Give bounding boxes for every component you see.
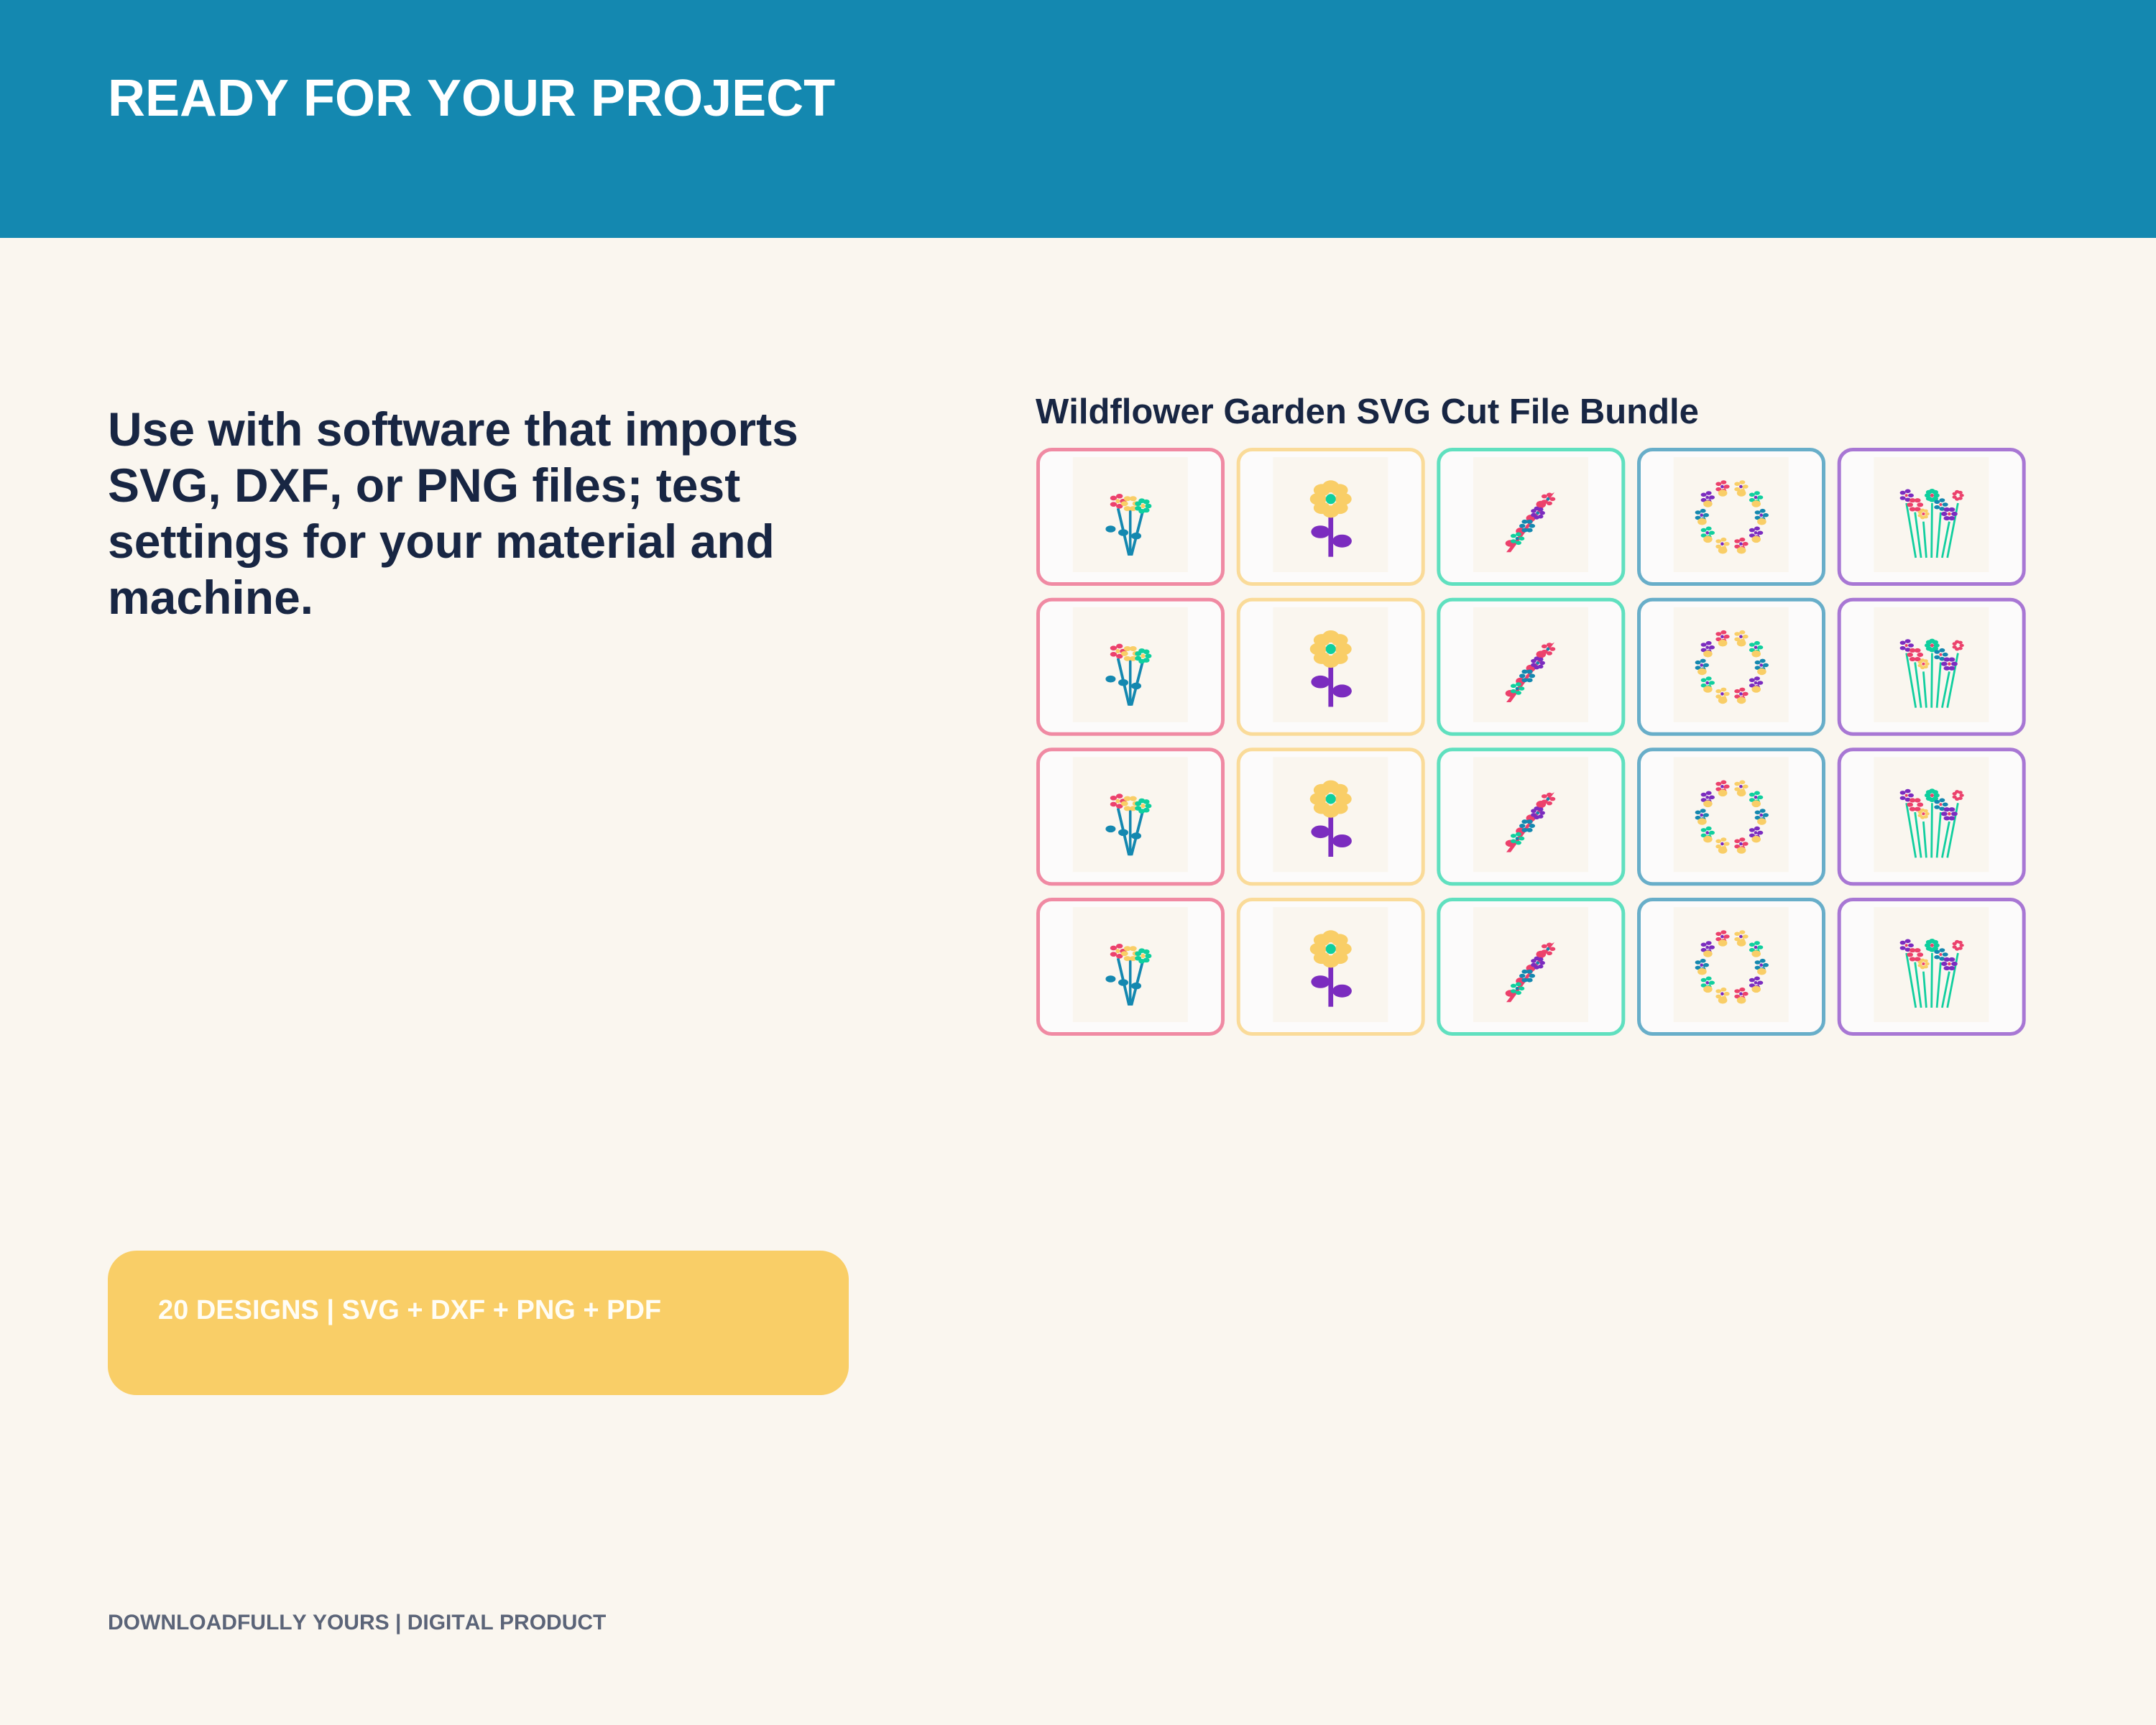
card: row 4 bouquet [1038, 900, 1223, 1034]
card: row 2 single flower [1238, 599, 1423, 734]
card: row 4 floral sprig [1439, 900, 1623, 1034]
card: row 3 single flower [1238, 750, 1423, 884]
card: row 4 single flower [1238, 900, 1423, 1034]
card: row 1 single flower [1238, 450, 1423, 584]
panel: design card grid [1038, 450, 2024, 1034]
card: row 3 bouquet [1038, 750, 1223, 884]
card: row 1 tall stems [1839, 450, 2024, 584]
card: row 2 wreath [1639, 599, 1824, 734]
heading: bundle name: Wildflower Garden SVG Cut File Bundle [1036, 392, 1699, 431]
card: row 1 floral sprig [1439, 450, 1623, 584]
text block: usage note: SVG, DXF, or PNG files; test [108, 459, 740, 512]
header band [0, 0, 2156, 238]
card: row 2 floral sprig [1439, 599, 1623, 734]
card: row 1 wreath [1639, 450, 1824, 584]
card: row 3 floral sprig [1439, 750, 1623, 884]
callout: format pill [108, 1251, 849, 1395]
card: row 2 bouquet [1038, 599, 1223, 734]
card: row 1 bouquet [1038, 450, 1223, 584]
pill label: 20 DESIGNS | SVG + DXF + PNG + PDF [158, 1295, 661, 1325]
card: row 4 tall stems [1839, 900, 2024, 1034]
card: row 2 tall stems [1839, 599, 2024, 734]
text block: usage note: settings for your material and [108, 515, 775, 568]
footer text: DOWNLOADFULLY YOURS | DIGITAL PRODUCT [108, 1611, 606, 1634]
card: row 3 wreath [1639, 750, 1824, 884]
card: row 3 tall stems [1839, 750, 2024, 884]
card: row 4 wreath [1639, 900, 1824, 1034]
text block: usage note: Use with software that imports [108, 402, 798, 456]
title: READY FOR YOUR PROJECT [108, 70, 835, 127]
text block: usage note: machine. [108, 571, 313, 624]
